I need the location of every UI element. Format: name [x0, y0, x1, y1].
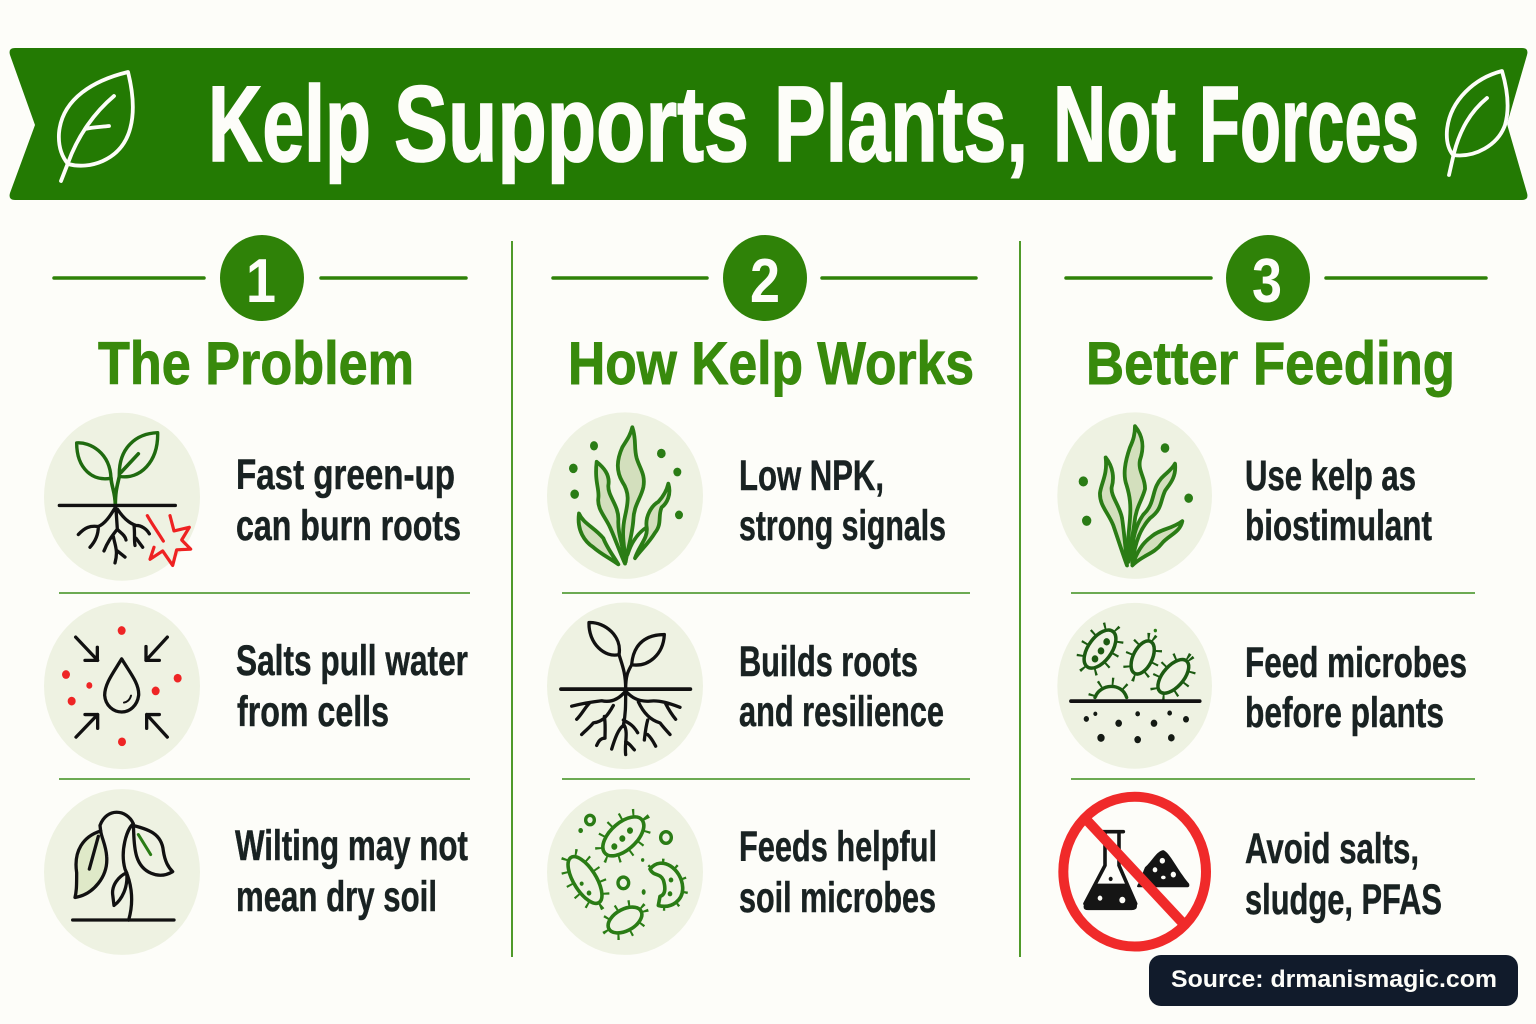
step number 3	[1066, 235, 1486, 321]
source badge	[1149, 955, 1518, 1006]
text: wilting may not: Wilting may not	[235, 822, 468, 870]
text: avoid salts: sludge, PFAS	[1245, 876, 1442, 924]
text: wilting may not: mean dry soil	[236, 873, 437, 921]
icon: seedling with deep roots	[547, 603, 703, 769]
title text: Supports	[394, 63, 749, 184]
text: builds roots: Builds roots	[739, 638, 918, 686]
text: use kelp as	[1245, 452, 1432, 550]
step number 1: 1	[246, 247, 276, 316]
text: low npk	[739, 452, 946, 550]
title text: Kelp	[208, 63, 371, 184]
text: use kelp as: biostimulant	[1245, 502, 1432, 550]
text: salts pull water	[236, 637, 468, 736]
text: salts pull water: Salts pull water	[236, 637, 468, 685]
icon: helpful microbes	[547, 789, 703, 955]
text: feeds helpful: Feeds helpful	[739, 823, 937, 871]
text: low npk: Low NPK,	[739, 452, 884, 500]
step number 2: 2	[750, 247, 780, 316]
text: use kelp as: Use kelp as	[1245, 452, 1416, 500]
text: low npk: strong signals	[739, 502, 946, 550]
text: avoid salts: Avoid salts,	[1245, 825, 1419, 873]
text: salts pull water: from cells	[237, 688, 389, 736]
title text: Not	[1053, 63, 1176, 184]
heading: the problem: The Problem	[98, 330, 414, 397]
panel: how kelp works	[547, 235, 976, 955]
icon: right leaf	[1447, 71, 1508, 175]
text: builds roots: and resilience	[739, 688, 944, 736]
step number 1	[54, 235, 466, 321]
heading: better feeding: Better Feeding	[1086, 330, 1455, 397]
icon: wilting plant	[44, 789, 200, 955]
text: feeds helpful: soil microbes	[739, 874, 936, 922]
panel: better feeding	[1057, 235, 1486, 947]
text: feed microbes	[1245, 639, 1467, 737]
text: feeds helpful	[739, 823, 937, 922]
text: feed microbes: before plants	[1245, 689, 1444, 737]
icon: microbes above soil	[1057, 603, 1212, 769]
title banner	[10, 48, 1527, 200]
column dividers	[512, 241, 1020, 957]
source badge: Source: drmanismagic.com	[1171, 966, 1497, 993]
panel: the problem	[44, 235, 470, 955]
text: fast green-up: Fast green-up	[236, 451, 455, 499]
icon: kelp with dots	[547, 412, 703, 579]
text: fast green-up	[236, 451, 461, 550]
icon: left leaf	[59, 72, 133, 181]
icon: kelp biostimulant	[1057, 412, 1212, 579]
icon: seedling with burned roots	[44, 413, 200, 581]
text: fast green-up: can burn roots	[236, 502, 461, 550]
title text	[208, 63, 1419, 184]
step number 2	[553, 235, 976, 321]
heading: how kelp works: How Kelp Works	[568, 330, 974, 397]
title text: Plants,	[774, 63, 1028, 184]
icon: prohibited flask and sludge	[1063, 797, 1206, 947]
text: wilting may not	[235, 822, 468, 921]
text: builds roots	[739, 638, 944, 736]
step number 3: 3	[1252, 247, 1282, 316]
text: avoid salts	[1245, 825, 1442, 924]
icon: salts pulling water from a drop	[44, 603, 200, 769]
